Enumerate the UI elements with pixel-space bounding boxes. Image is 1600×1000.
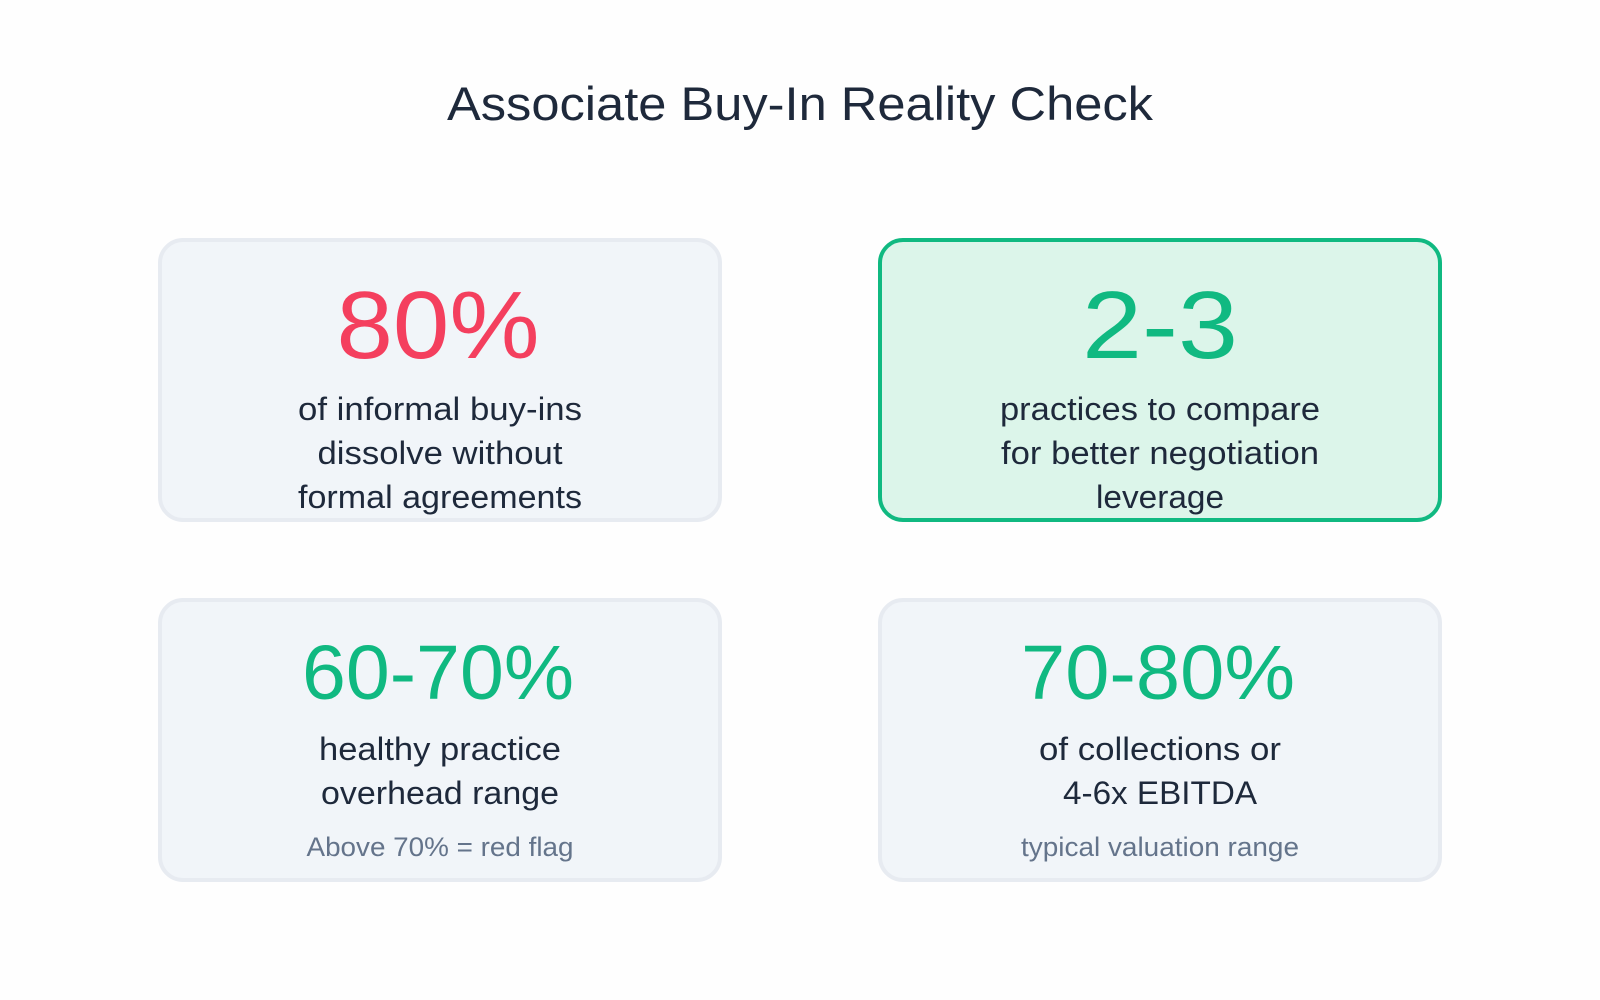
description: healthy practice bbox=[319, 731, 561, 767]
title: Associate Buy-In Reality Check bbox=[447, 77, 1154, 130]
panel: practices to compare bbox=[880, 240, 1440, 520]
panel: overhead range bbox=[160, 600, 720, 880]
description: leverage bbox=[1096, 479, 1224, 515]
description: of informal buy-ins bbox=[298, 391, 582, 427]
card background bbox=[160, 600, 720, 880]
description bbox=[1000, 391, 1320, 515]
stat: 70-80%: 70-80% bbox=[1021, 630, 1295, 716]
stat: 60-70%: 60-70% bbox=[302, 630, 574, 716]
description: practices to compare bbox=[1000, 391, 1320, 427]
description: of collections or bbox=[1039, 731, 1281, 767]
description: 4-6x EBITDA bbox=[1063, 775, 1258, 811]
card background bbox=[160, 240, 720, 520]
stat: 2-3: 2-3 bbox=[1082, 272, 1238, 379]
description bbox=[319, 731, 561, 811]
description bbox=[298, 391, 582, 515]
note: typical valuation range bbox=[1021, 832, 1299, 862]
card background bbox=[880, 600, 1440, 880]
panel: informal buy-ins bbox=[160, 240, 720, 520]
card background bbox=[880, 240, 1440, 520]
description: formal agreements bbox=[298, 479, 582, 515]
description: overhead range bbox=[321, 775, 559, 811]
panel: valuation range bbox=[880, 600, 1440, 880]
description: dissolve without bbox=[318, 435, 563, 471]
description bbox=[1039, 731, 1281, 811]
stat: 80%: 80% bbox=[336, 272, 540, 379]
description: for better negotiation bbox=[1001, 435, 1319, 471]
note: Above 70% = red flag bbox=[306, 832, 574, 862]
